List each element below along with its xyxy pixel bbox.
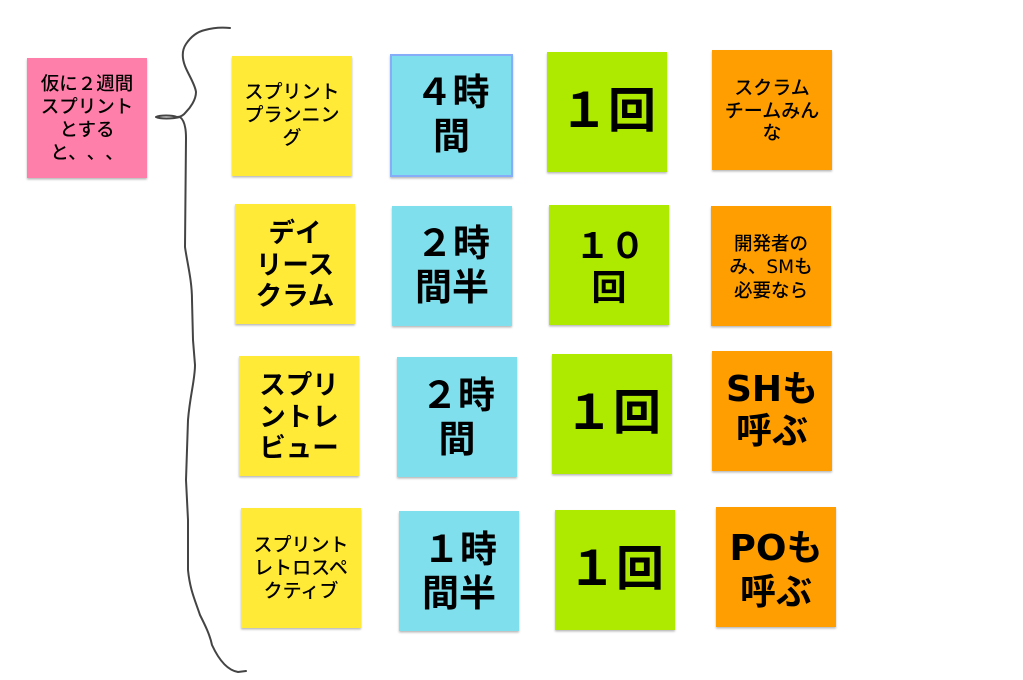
note: sprint review: スプリ ントレ ビュー: [259, 363, 339, 465]
note: sprint retrospective: スプリント レトロスペ クティブ: [253, 530, 348, 603]
note: daily scrum: デイ リース クラム: [256, 211, 334, 313]
note: developers only: [711, 206, 831, 326]
note: once: １回: [568, 529, 664, 599]
note: 2.5 hours: [392, 206, 512, 326]
note: sprint planning: [232, 56, 352, 176]
note: developers only: 開発者の み、SMも 必要なら: [729, 230, 813, 303]
note: sprint retrospective: [241, 508, 361, 628]
note: once: １回: [565, 373, 661, 443]
note: stakeholders too: SHも 呼ぶ: [726, 360, 818, 454]
note: 1.5 hours: １時 間半: [422, 519, 497, 617]
note: sprint planning: スプリント プランニン グ: [244, 77, 340, 150]
note: ten times: １０ 回: [575, 218, 645, 311]
note: 4 hours: ４時 間: [416, 62, 490, 160]
note: premise: 仮に２週間 スプリント とする と、、、: [41, 70, 133, 165]
note: 2 hours: ２時 間: [421, 364, 495, 462]
note: daily scrum: [235, 204, 355, 324]
note: whole scrum team: [712, 50, 832, 170]
note: stakeholders too: [712, 351, 832, 471]
note: 2 hours: [397, 357, 517, 477]
note: product owner too: POも 呼ぶ: [729, 518, 822, 614]
note: product owner too: [716, 507, 836, 627]
note: once: １回: [560, 71, 656, 141]
note: 1.5 hours: [399, 511, 519, 631]
note: sprint review: [239, 356, 359, 476]
note: premise: [27, 58, 147, 178]
note: whole scrum team: スクラム チームみん な: [725, 73, 819, 145]
note: once: [552, 354, 672, 474]
note: once: [547, 52, 667, 172]
note: 4 hours: [390, 54, 513, 177]
note: ten times: [549, 205, 669, 325]
note: once: [555, 510, 675, 630]
note: 2.5 hours: ２時 間半: [415, 213, 490, 311]
